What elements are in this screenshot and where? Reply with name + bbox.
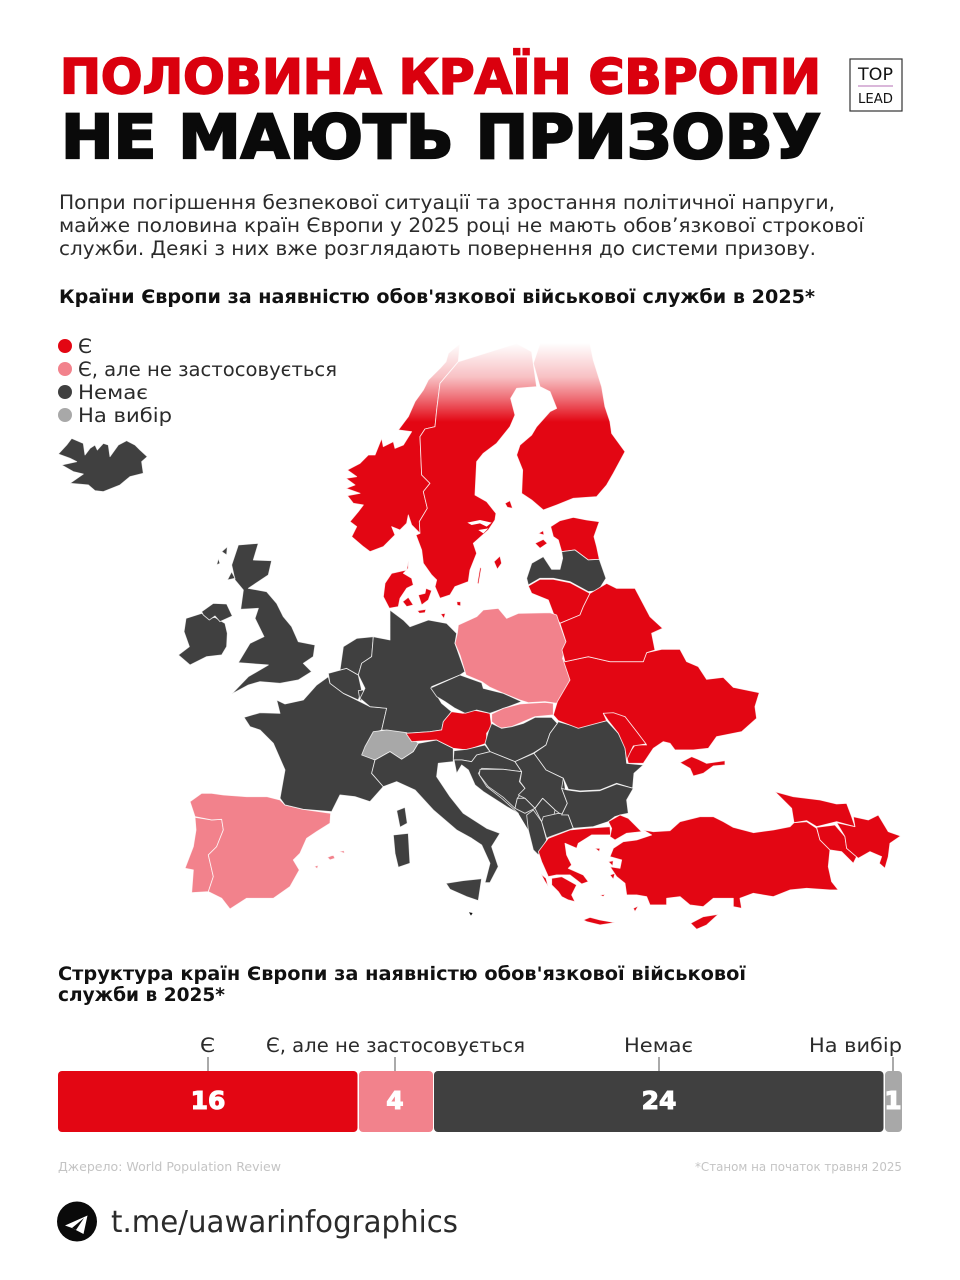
North Macedonia bbox=[542, 813, 573, 838]
Bulgaria bbox=[562, 784, 633, 828]
logo: Top Lead: LEAD bbox=[858, 92, 893, 107]
Corsica bbox=[397, 807, 407, 827]
bar chart heading bbox=[58, 963, 746, 1006]
intro text bbox=[59, 191, 865, 260]
bar chart heading: Структура країн Європи за наявністю обов'язкової військової bbox=[58, 963, 746, 985]
Aegean islands bbox=[541, 848, 638, 912]
Moldova bbox=[603, 713, 646, 760]
Belarus bbox=[560, 583, 663, 662]
western Europe bbox=[178, 543, 500, 916]
source: Джерело: World Population Review bbox=[58, 1159, 281, 1174]
Portugal bbox=[185, 817, 223, 893]
Slovenia bbox=[453, 745, 490, 762]
Croatia bbox=[454, 752, 522, 813]
bar labels: На вибір bbox=[809, 1034, 902, 1057]
map of Europe bbox=[58, 332, 901, 929]
map heading: Країни Європи за наявністю обов'язкової військової служби в 2025* bbox=[59, 287, 815, 308]
Malta bbox=[469, 912, 473, 916]
Azerbaijan bbox=[837, 815, 901, 868]
Armenia bbox=[817, 825, 857, 863]
Greece bbox=[538, 827, 611, 884]
Georgia bbox=[775, 792, 855, 827]
Peloponnese bbox=[552, 877, 577, 902]
segment: 16: 16 bbox=[191, 1086, 225, 1115]
title: ПОЛОВИНА КРАЇН ЄВРОПИ bbox=[60, 48, 821, 106]
footnote: *Станом на початок травня 2025 bbox=[695, 1159, 902, 1174]
central and eastern Europe bbox=[431, 583, 901, 929]
Cyprus bbox=[691, 914, 718, 929]
Lithuania bbox=[528, 579, 590, 623]
Crete bbox=[583, 917, 615, 925]
Italy bbox=[372, 740, 500, 883]
northern fade bbox=[340, 332, 660, 422]
Nordics and Baltics bbox=[346, 343, 625, 623]
Balearic Islands bbox=[314, 851, 345, 869]
Albania bbox=[527, 810, 547, 855]
segment: 1 bbox=[884, 1071, 902, 1132]
Switzerland bbox=[362, 730, 418, 760]
intro text: Попри погіршення безпекової ситуації та зростання політичної напруги, bbox=[59, 191, 835, 214]
intro text: служби. Деякі з них вже розглядають повернення до системи призову. bbox=[59, 237, 816, 260]
telegram link: t.me/uawarinfographics bbox=[111, 1205, 458, 1240]
segment: 4: 4 bbox=[386, 1086, 404, 1115]
Sicily bbox=[446, 879, 482, 901]
Germany bbox=[358, 610, 465, 733]
Bosnia and Herzegovina bbox=[479, 769, 525, 808]
bar chart bbox=[58, 1034, 902, 1132]
Crimea bbox=[680, 757, 725, 776]
icon: telegram bbox=[57, 1202, 97, 1242]
bar labels: Є bbox=[200, 1034, 215, 1057]
legend: Є, але не застосовується bbox=[78, 358, 337, 381]
Montenegro bbox=[515, 798, 535, 813]
segment: 16 bbox=[58, 1071, 358, 1132]
Belgium bbox=[328, 668, 362, 700]
legend: Є bbox=[78, 335, 92, 358]
intro text: майже половина країн Європи у 2025 році не мають обов’язкової строкової bbox=[59, 214, 865, 237]
Austria bbox=[406, 709, 492, 750]
Poland bbox=[455, 608, 571, 703]
bar labels: Немає bbox=[624, 1034, 693, 1057]
bar labels: Є, але не застосовується bbox=[266, 1034, 525, 1057]
Estonia bbox=[551, 517, 599, 560]
bar labels bbox=[200, 1034, 902, 1057]
legend: Немає bbox=[78, 381, 148, 404]
Latvia bbox=[527, 550, 606, 592]
title bbox=[60, 48, 821, 173]
Turkey, European part bbox=[608, 815, 642, 840]
segment: 1: 1 bbox=[884, 1086, 902, 1115]
Ukraine bbox=[553, 649, 759, 763]
France bbox=[244, 677, 387, 812]
bar chart heading: служби в 2025* bbox=[58, 984, 225, 1006]
Kosovo bbox=[535, 798, 555, 822]
Denmark bbox=[383, 561, 413, 608]
Luxembourg bbox=[358, 690, 366, 701]
legend bbox=[58, 335, 337, 427]
Netherlands bbox=[340, 637, 373, 675]
title: НЕ МАЮТЬ ПРИЗОВУ bbox=[61, 102, 821, 173]
Spain bbox=[190, 793, 331, 909]
Northern Ireland bbox=[202, 603, 232, 622]
Norway bbox=[346, 343, 460, 552]
Aland bbox=[505, 501, 513, 508]
Slovakia bbox=[492, 702, 553, 728]
Balkan landmass base bbox=[457, 752, 573, 853]
Romania bbox=[534, 721, 643, 791]
Finland bbox=[517, 343, 625, 510]
Sweden bbox=[416, 343, 537, 598]
Hungary bbox=[485, 717, 557, 762]
Iceland bbox=[58, 438, 147, 492]
segment: 4 bbox=[359, 1071, 433, 1132]
Turkey bbox=[610, 817, 838, 908]
logo: Top Lead: TOP bbox=[857, 65, 893, 84]
segment: 24 bbox=[434, 1071, 884, 1132]
Sardinia bbox=[393, 833, 410, 867]
Great Britain bbox=[232, 543, 315, 694]
Ireland bbox=[178, 613, 227, 665]
logo: Top Lead bbox=[850, 59, 902, 111]
Serbia bbox=[515, 753, 567, 815]
Swedish islands bbox=[457, 556, 502, 606]
Czechia bbox=[431, 675, 522, 713]
Swedish lakes bbox=[467, 520, 492, 533]
segment: 24: 24 bbox=[642, 1086, 676, 1115]
legend: На вибір bbox=[78, 404, 172, 427]
